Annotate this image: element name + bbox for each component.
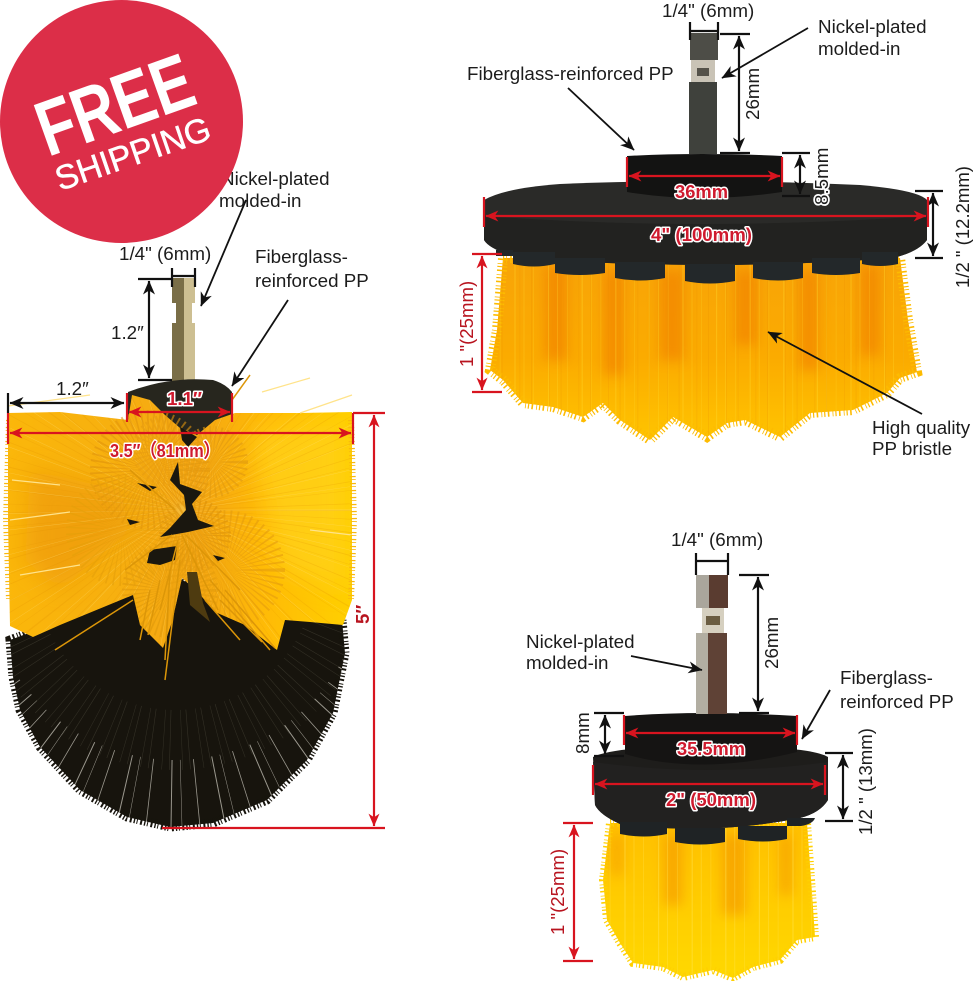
red dimensions: 36mm xyxy=(675,181,728,202)
red dimensions: 3.5″（81mm） xyxy=(110,440,220,461)
text labels: 1/4" (6mm) xyxy=(671,529,763,550)
text labels: Fiberglass-reinforced PP xyxy=(467,63,674,84)
shaft xyxy=(172,278,195,381)
text labels: 26mm xyxy=(761,617,782,669)
loose strands xyxy=(55,375,275,680)
badge text: FREE xyxy=(24,36,205,173)
badge text xyxy=(24,36,216,199)
central tufts xyxy=(94,432,255,614)
hub xyxy=(627,154,782,198)
red dimensions xyxy=(547,715,825,961)
red dimensions: 1 "(25mm) xyxy=(547,849,568,935)
hub xyxy=(128,379,232,436)
top-right brush xyxy=(484,33,927,440)
bristles xyxy=(600,823,820,978)
text labels: 1/2 " (12.2mm) xyxy=(952,166,973,288)
red dimensions xyxy=(8,388,385,828)
text labels: PP bristle xyxy=(872,438,952,459)
shaft xyxy=(689,33,718,154)
red dimensions: 35.5mm xyxy=(677,738,745,759)
arrows xyxy=(8,200,288,413)
badge: free shipping xyxy=(0,0,243,243)
text labels xyxy=(467,0,973,459)
badge text: SHIPPING xyxy=(50,110,216,199)
text labels: 1/4" (6mm) xyxy=(119,243,211,264)
red dimensions: 1.1″ xyxy=(167,388,202,409)
text labels: 1.2″ xyxy=(56,378,89,399)
text labels xyxy=(56,168,369,399)
badge circle xyxy=(0,0,243,243)
black bristle dome xyxy=(5,578,350,832)
dimensions: top brush xyxy=(456,0,973,459)
disk xyxy=(484,181,927,265)
pegs xyxy=(496,250,898,284)
text labels: High quality xyxy=(872,417,971,438)
text labels: 1.2″ xyxy=(111,322,144,343)
text labels: 1/2 " (13mm) xyxy=(855,728,876,835)
text labels: reinforced PP xyxy=(255,270,369,291)
text labels xyxy=(526,529,954,835)
text labels: 8mm xyxy=(572,712,593,754)
bristles xyxy=(490,258,920,440)
bottom-right brush xyxy=(593,575,828,978)
text labels: Fiberglass- xyxy=(255,246,348,267)
dimensions: left brush xyxy=(8,168,385,828)
black arrows xyxy=(568,22,943,414)
pegs xyxy=(620,818,815,844)
red dimensions: 5″ xyxy=(352,605,373,624)
red dimensions: 2" (50mm) xyxy=(666,789,756,810)
disk xyxy=(593,746,828,829)
core stem xyxy=(127,427,225,622)
text labels: 26mm xyxy=(742,68,763,120)
yellow bristles xyxy=(6,375,354,680)
side fringe xyxy=(6,420,354,600)
text labels: Fiberglass- xyxy=(840,667,933,688)
hub xyxy=(625,713,797,765)
text labels: Nickel-plated xyxy=(818,16,927,37)
text labels: Nickel-plated xyxy=(526,631,635,652)
dimensions: bottom brush xyxy=(526,529,954,961)
red dimensions: 4" (100mm) xyxy=(651,224,752,245)
text labels: reinforced PP xyxy=(840,691,954,712)
shaft xyxy=(696,575,728,714)
text labels: 8.5mm xyxy=(811,148,832,205)
text labels: molded-in xyxy=(219,190,301,211)
black arrows xyxy=(594,553,853,821)
text labels: Nickel-plated xyxy=(221,168,330,189)
text labels: 1/4" (6mm) xyxy=(662,0,754,21)
red dimensions: 1 "(25mm) xyxy=(456,281,477,367)
text labels: molded-in xyxy=(818,38,900,59)
text labels: molded-in xyxy=(526,652,608,673)
red dimensions xyxy=(456,157,928,392)
